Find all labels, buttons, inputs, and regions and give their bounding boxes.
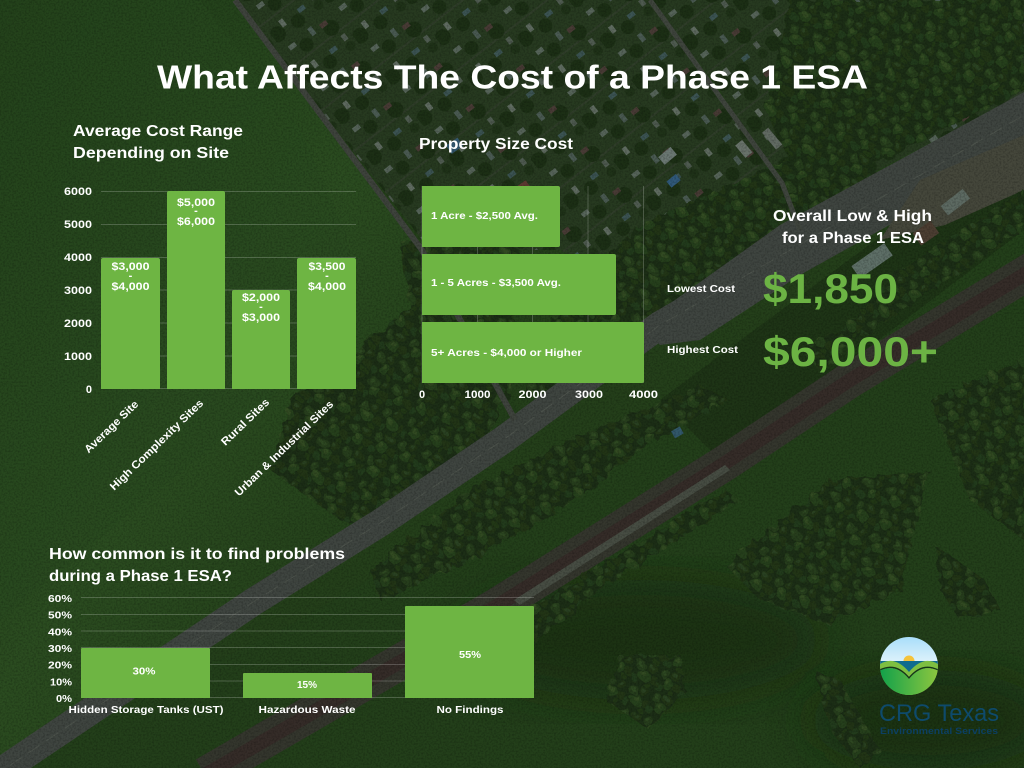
bar: average site: - [129, 270, 133, 282]
y axis labels: 2000 [64, 318, 92, 330]
bar: rural sites: - [259, 301, 263, 313]
bar: urban and industrial sites: - [325, 270, 329, 282]
background: railway tracks [205, 265, 1024, 768]
bar: urban and industrial sites: $3,500 [308, 261, 346, 273]
icon: landscape emblem [880, 637, 938, 700]
panel: average cost range by site [64, 123, 356, 499]
bar: hazardous waste: 15% [297, 679, 318, 691]
x axis labels, rotated: Urban & Industrial Sites [233, 399, 336, 499]
figure: lowest cost: $1,850 [763, 265, 898, 312]
bar: rural sites: $3,000 [242, 312, 280, 324]
y axis labels: 40% [48, 626, 73, 638]
heading: average cost range [73, 123, 243, 162]
y axis labels: 4000 [64, 252, 92, 264]
heading: property size cost: Property Size Cost [419, 136, 573, 153]
y axis labels: 50% [48, 610, 73, 622]
heading: average cost range: Average Cost Range [73, 123, 243, 140]
figure: highest cost: $6,000+ [763, 328, 938, 375]
bar: 1 acre [422, 186, 560, 247]
bar: 5 plus acres [422, 322, 644, 383]
x axis labels: 0 [419, 389, 425, 401]
bar: urban and industrial sites: $4,000 [308, 281, 346, 293]
logo: CRG Texas Environmental Services [879, 637, 999, 736]
bar: hidden storage tanks [68, 648, 224, 716]
bar: no findings: No Findings [436, 704, 504, 716]
panel: how common are problems [48, 546, 534, 716]
bar: 1 acre: 1 Acre - $2,500 Avg. [431, 210, 538, 222]
background: widened highway section upper right [640, 92, 1024, 345]
heading: overall low and high: Overall Low & High [773, 208, 932, 225]
x axis labels: 3000 [575, 389, 603, 401]
x axis labels: 1000 [464, 389, 490, 401]
logo tagline: Environmental Services [880, 726, 998, 736]
bar: 1 to 5 acres [422, 254, 616, 315]
heading: how common [49, 546, 345, 585]
bar: high complexity sites [167, 191, 225, 389]
logo wordmark: CRG Texas [879, 700, 999, 727]
background: roadside yard [880, 135, 1024, 240]
panel: overall low and high [667, 208, 938, 375]
y axis labels: 20% [48, 660, 73, 672]
title: What Affects The Cost of a Phase 1 ESA [157, 58, 868, 96]
bar: hazardous waste: Hazardous Waste [258, 704, 356, 716]
background: rural road [235, 0, 515, 420]
x axis labels, rotated [82, 397, 336, 499]
heading: overall low and high: for a Phase 1 ESA [782, 230, 924, 247]
y axis labels: 30% [48, 643, 73, 655]
bar: rural sites: $2,000 [242, 292, 280, 304]
bar: hidden storage tanks: 30% [132, 666, 156, 678]
background: coloured village roofs [446, 128, 970, 438]
x axis labels, rotated: Average Site [82, 399, 141, 456]
bar: high complexity sites: - [194, 205, 198, 217]
heading: how common: How common is it to find problems [49, 546, 345, 563]
label: lowest cost: Lowest Cost [667, 283, 736, 295]
x axis labels: 4000 [629, 389, 658, 401]
background: station platform [514, 465, 730, 605]
y axis labels: 10% [50, 676, 73, 688]
y axis labels: 6000 [64, 186, 92, 198]
heading: how common: during a Phase 1 ESA? [49, 568, 232, 585]
x axis labels [419, 389, 658, 401]
bar: urban and industrial sites [297, 258, 356, 389]
y axis labels: 1000 [64, 351, 92, 363]
x axis labels: 2000 [518, 389, 546, 401]
bar: 5 plus acres: 5+ Acres - $4,000 or Higher [431, 347, 582, 359]
heading: overall low and high [773, 208, 932, 247]
y axis labels [48, 593, 73, 705]
heading: average cost range: Depending on Site [73, 145, 229, 162]
bar: no findings: 55% [459, 649, 482, 661]
chart gridlines [101, 192, 356, 388]
y axis labels: 3000 [64, 285, 92, 297]
bar: average site [101, 258, 160, 389]
chart gridlines [81, 598, 534, 698]
bar: hidden storage tanks: Hidden Storage Tanks (UST) [68, 704, 224, 716]
y axis labels: 5000 [64, 219, 92, 231]
x axis labels, rotated: Rural Sites [219, 397, 272, 448]
bar: high complexity sites: $5,000 [177, 197, 215, 209]
background: village road [650, 0, 800, 230]
bar: high complexity sites: $6,000 [177, 216, 215, 228]
bar: rural sites [232, 290, 290, 389]
y axis labels: 0% [56, 693, 73, 705]
bar: average site: $4,000 [112, 281, 150, 293]
bar: average site: $3,000 [112, 261, 150, 273]
y axis labels [64, 186, 92, 396]
bar: hazardous waste [243, 673, 372, 716]
background: railway embankment [205, 265, 1024, 768]
bar: 1 to 5 acres: 1 - 5 Acres - $3,500 Avg. [431, 277, 561, 289]
label: highest cost: Highest Cost [667, 344, 739, 356]
y axis labels: 0 [86, 384, 92, 396]
panel: property size cost [419, 136, 658, 401]
y axis labels: 60% [48, 593, 73, 605]
bar: no findings [405, 606, 534, 716]
x axis labels, rotated: High Complexity Sites [108, 398, 206, 493]
chart gridlines [422, 186, 644, 383]
